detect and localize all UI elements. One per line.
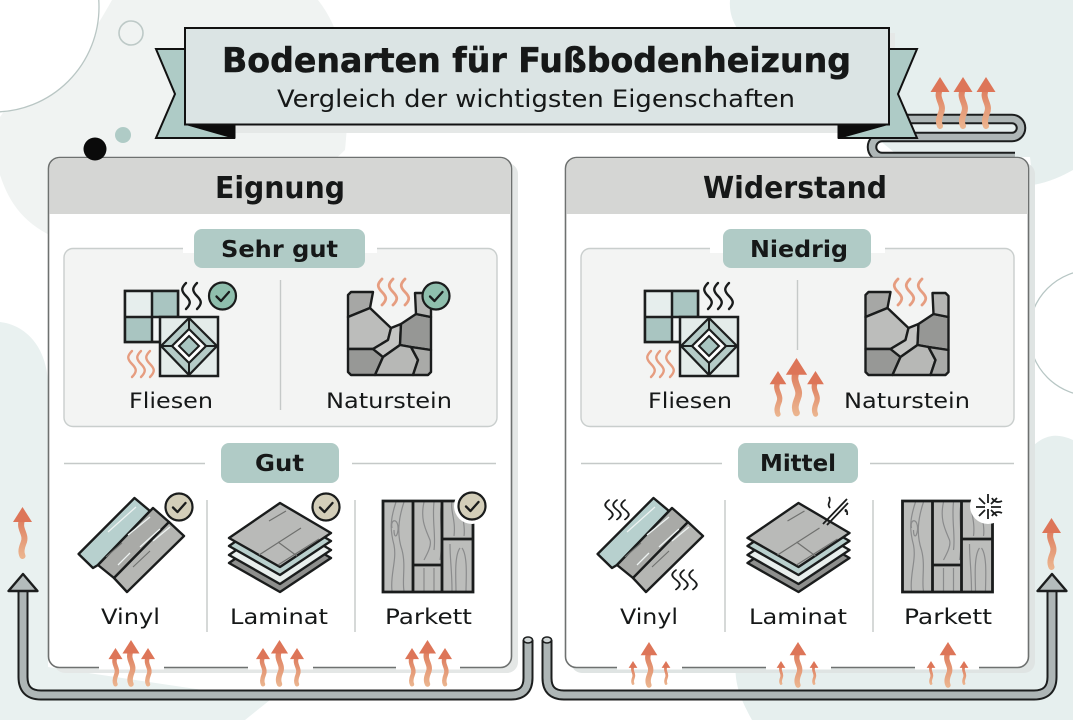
heading: Widerstand: Widerstand (703, 171, 887, 206)
label: Fliesen: Fliesen (648, 389, 732, 414)
divider (796, 280, 798, 350)
ribbon fold right (838, 124, 889, 138)
title banner (185, 28, 889, 124)
pill text: Niedrig (750, 237, 848, 263)
label: Parkett: Parkett (904, 605, 992, 630)
label: Laminat: Laminat (749, 605, 847, 630)
label: Fliesen: Fliesen (129, 389, 213, 414)
label: Naturstein: Naturstein (326, 389, 452, 414)
label: Naturstein: Naturstein (844, 389, 970, 414)
panel shadow (54, 163, 518, 673)
group: Gut (64, 443, 496, 632)
heating pipe: top right (872, 119, 1021, 157)
title ribbon (156, 28, 917, 138)
pipe arrow: right (542, 574, 1066, 695)
decorative arc: right (1029, 270, 1073, 396)
icon: Laminat (229, 494, 340, 592)
heat arrow: far right (1042, 518, 1061, 567)
pill text: Mittel (760, 451, 836, 477)
heat arrows: center (770, 358, 824, 414)
icon: Naturstein (866, 279, 948, 375)
dividers (207, 500, 355, 632)
panel header band (566, 158, 1028, 214)
subtitle: Vergleich der wichtigsten Eigenschaften (277, 85, 795, 113)
panel shadow (571, 163, 1035, 673)
panel: Eignung (48, 158, 518, 673)
title: Bodenarten für Fußbodenheizung (222, 41, 851, 81)
pill: Mittel (738, 443, 858, 483)
background blob: bottom right (736, 436, 1073, 720)
panel body (48, 158, 512, 668)
decorative circle: small outline (119, 21, 143, 45)
label: Vinyl: Vinyl (101, 605, 160, 630)
pill text: Gut (255, 451, 304, 477)
background blob: bottom left (0, 322, 270, 720)
divider (280, 280, 282, 410)
heat arrows: Eignung bottom (108, 640, 452, 684)
rule left (64, 462, 496, 464)
heat arrow: far left (13, 507, 32, 556)
panel body (566, 158, 1028, 668)
ribbon fold left (185, 124, 235, 138)
background blob: top left (0, 0, 347, 240)
icon: Fliesen (125, 282, 236, 377)
pill gap (183, 245, 377, 253)
heat arrows: top right (930, 77, 996, 126)
panel header band (49, 158, 511, 214)
pill: Gut (221, 443, 339, 483)
group: Mittel (581, 443, 1014, 632)
heat arrows: Widerstand bottom (629, 642, 968, 685)
panel: Widerstand (566, 158, 1035, 673)
decorative circle outline: top left arc (0, 0, 99, 112)
dividers (725, 500, 873, 632)
icon: Vinyl (79, 494, 192, 592)
background blob: top right (730, 0, 1073, 185)
group: Sehr gut (64, 229, 497, 426)
pill text: Sehr gut (221, 237, 338, 263)
icon: Vinyl (598, 498, 703, 592)
pipe arrow: left (8, 574, 532, 695)
group box (581, 248, 1014, 426)
label: Parkett: Parkett (385, 605, 472, 630)
pill: Niedrig (723, 229, 871, 268)
black dot (84, 138, 106, 160)
panel border gaps (99, 666, 979, 670)
group: Niedrig (581, 229, 1014, 426)
ribbon tail left (156, 49, 235, 138)
icon: Naturstein (348, 279, 450, 375)
icon: Fliesen (645, 283, 738, 377)
group box (64, 248, 497, 426)
decorative circle: teal dot (115, 127, 131, 143)
label: Vinyl: Vinyl (620, 605, 678, 630)
icon: Parkett (902, 488, 1006, 592)
label: Laminat: Laminat (230, 605, 328, 630)
icon: Parkett (383, 488, 490, 592)
pill: Sehr gut (194, 229, 365, 268)
pill gap (710, 245, 885, 253)
ribbon shadow (190, 33, 895, 133)
ribbon tail right (838, 49, 917, 138)
icon: Laminat (748, 497, 850, 592)
rule (581, 462, 1014, 464)
heading: Eignung: Eignung (215, 171, 345, 206)
